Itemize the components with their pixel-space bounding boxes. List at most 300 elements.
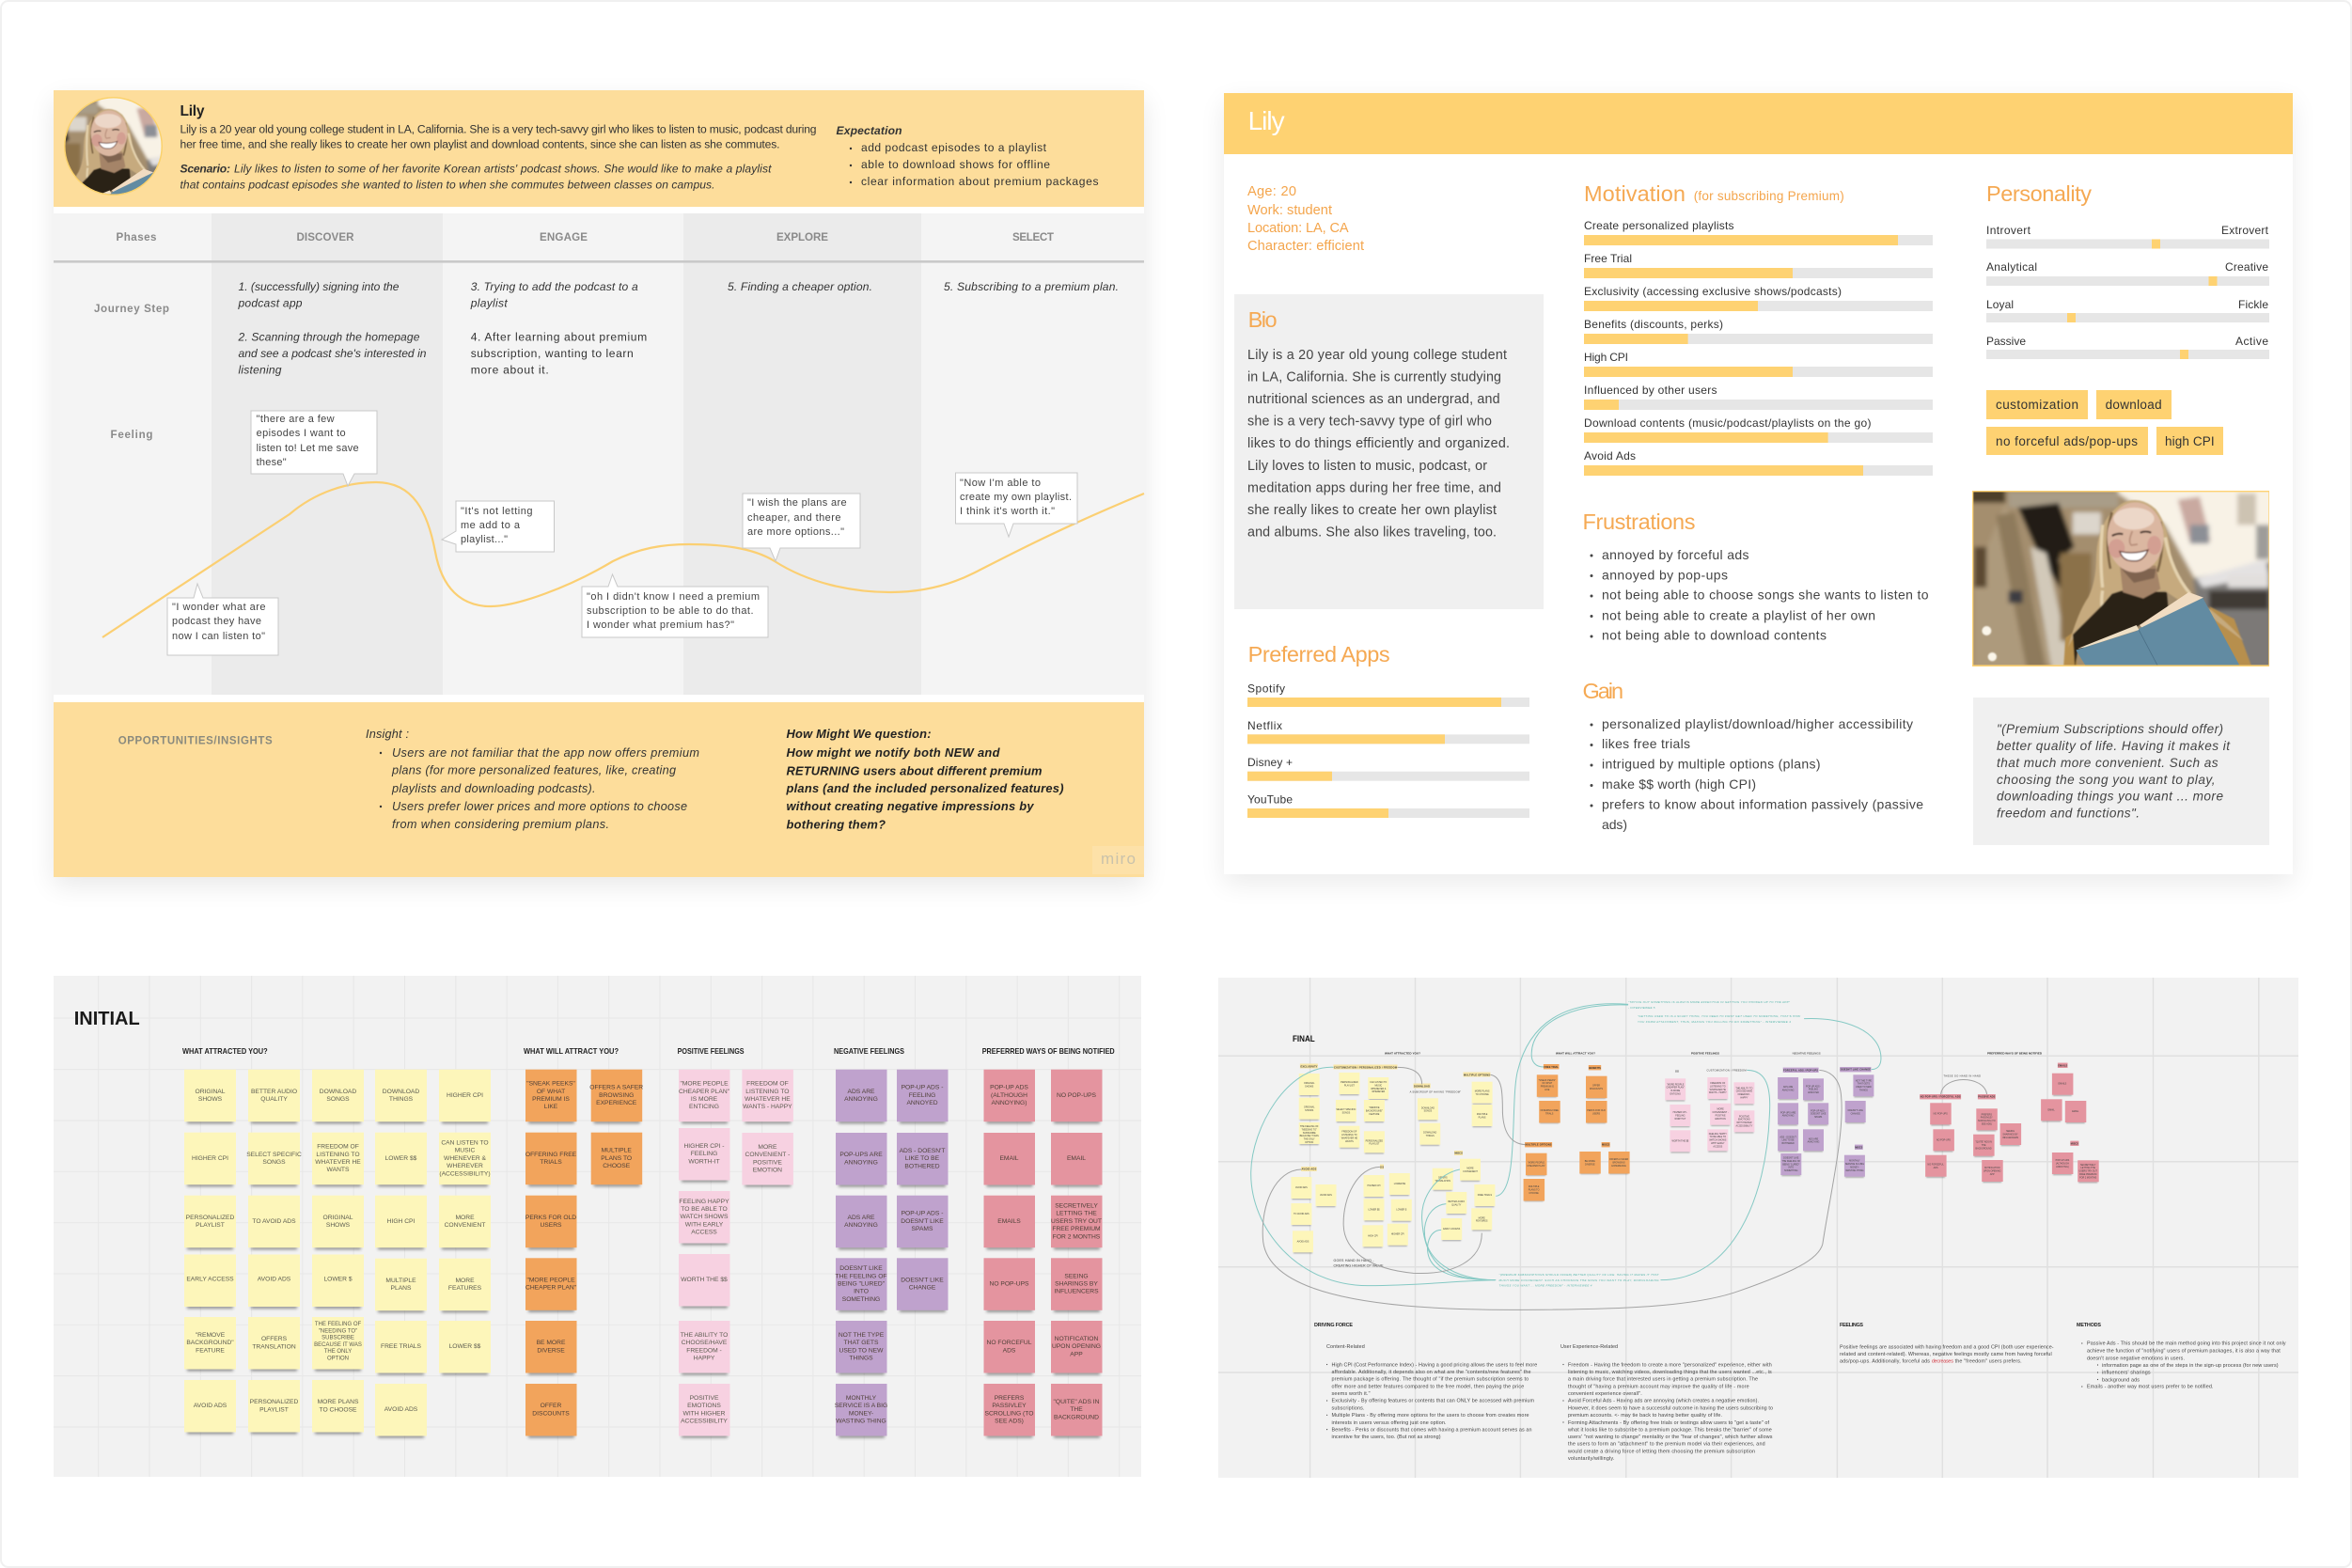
red clusters: FOR 2 MONTHS <box>2079 1176 2097 1179</box>
content-related bullets: Multiple Plans - By offering more options for the users to choose from creates more <box>1331 1413 1529 1419</box>
driving force summary: Content-Related <box>1326 1344 1365 1350</box>
purple clusters: WASTING THING <box>1845 1169 1864 1172</box>
red clusters: SHARINGS BY <box>2002 1133 2018 1136</box>
yellow clusters: HIGHER CPI <box>1368 1184 1381 1187</box>
purple sticky notes: negative feelings: ANNOYING <box>844 1159 878 1166</box>
purple clusters: POP-UP ADS - <box>1811 1109 1826 1112</box>
journey steps: engage <box>470 280 647 377</box>
yellow clusters: WHATEVER HE <box>1341 1137 1357 1139</box>
purple clusters: ANNOYING <box>1808 1141 1820 1144</box>
purple sticky notes: negative feelings: LIKE TO BE <box>905 1155 940 1162</box>
motivation bars: Download contents (music/podcast/playlists on the go) <box>1584 416 1871 430</box>
feelings summary: the "freedom" users prefers. <box>1955 1359 2022 1365</box>
red sticky notes: preferred ways of being notified: SEEING <box>1064 1273 1089 1279</box>
preferred apps: Disney + <box>1247 756 1293 769</box>
pink sticky notes: positive feelings: "MORE PEOPLE <box>680 1081 729 1088</box>
miro watermark <box>1092 846 1144 874</box>
speech bubble: there are a few: episodes I want to <box>257 428 346 439</box>
red clusters: APP <box>1990 1173 1995 1176</box>
red clusters: PASSIVLEY <box>1981 1117 1993 1120</box>
methods summary: achieve the function of "notifying" users of premium packages, it is also a way that <box>2087 1349 2281 1355</box>
user-experience bullets: users' "not wanting to change" mentality or the "fear of changes", which further allows <box>1568 1435 1773 1440</box>
red clusters: NO FORCEFUL <box>1928 1164 1944 1167</box>
demographics: Character: efficient <box>1247 239 1364 254</box>
yellow sticky notes: what attracted you: LOWER $$ <box>449 1343 481 1350</box>
yellow sticky notes: what attracted you: PLAYLIST <box>259 1406 289 1413</box>
interview quotes: "GETTING USED TO IS A SCARY THING, YOU NEED TO FIRST GET USED TO SOMETHING, THAT'S HOW <box>1638 1014 1801 1018</box>
purple clusters: DOESN'T LIKE <box>1783 1156 1799 1160</box>
purple sticky notes: negative feelings: MONEY- <box>849 1410 873 1417</box>
category labels: CUSTOMIZATION / PERSONALIZED / FREEDOM <box>1334 1065 1397 1069</box>
yellow clusters: OPTION <box>1305 1141 1314 1144</box>
user-experience bullets: Forming Attachments - By offering free trials or testings allow users to "get a taste" of <box>1568 1420 1769 1426</box>
demographics: Location: LA, CA <box>1247 221 1349 236</box>
yellow sticky notes: what attracted you: TRANSLATION <box>252 1343 296 1350</box>
speech bubble: own playlist: I think it's worth it." <box>960 506 1055 517</box>
speech bubble: premium subscription: "oh I didn't know I need a premium <box>587 591 760 603</box>
category labels: NO POP-UPS / FORCEFUL ADS <box>1921 1095 1961 1099</box>
user-experience bullets <box>1562 1362 1773 1462</box>
insights: Users are not familiar that the app now offers premium <box>392 746 699 760</box>
red clusters <box>1925 1074 2099 1183</box>
yellow sticky notes: what attracted you: SONGS <box>262 1159 286 1166</box>
methods summary: Passive Ads - This should be the main method going into this project since it not only <box>2087 1341 2286 1347</box>
pink clusters: WANTS - HAPPY <box>1709 1091 1727 1094</box>
motivation bars: High CPI <box>1584 351 1628 364</box>
column heading: POSITIVE FEELINGS <box>678 1046 745 1056</box>
yellow sticky notes: what attracted you: HIGHER CPI <box>447 1092 483 1099</box>
journey steps: discover <box>237 280 427 377</box>
yellow sticky notes: what attracted you: PLANS <box>391 1285 412 1292</box>
yellow sticky notes: what attracted you: FREEDOM OF <box>317 1144 359 1151</box>
red sticky notes: preferred ways of being notified: POP-UP ADS <box>990 1085 1028 1091</box>
red sticky notes: preferred ways of being notified: NO POP-UPS <box>989 1281 1029 1288</box>
category labels: $$ <box>1675 1069 1679 1073</box>
frustrations list: Frustrations <box>1583 510 1696 534</box>
speech bubble: there are a few: listen to! Let me save <box>257 443 359 454</box>
category labels: MISCS <box>1602 1143 1610 1147</box>
red clusters: POP-UP ADS <box>2056 1159 2070 1162</box>
yellow clusters: WANTS <box>1345 1140 1354 1143</box>
pink sticky notes: positive feelings: WORTH THE $$ <box>681 1277 728 1283</box>
column headings: POSITIVE FEELINGS <box>1691 1052 1719 1056</box>
user-experience bullets: a main driving force that interested users in getting a premium subscription. The <box>1568 1377 1758 1383</box>
purple clusters: SERVICE IS A BIG <box>1845 1163 1864 1166</box>
yellow sticky notes: what attracted you: QUALITY <box>260 1096 288 1103</box>
red sticky notes: preferred ways of being notified: (ALTHOUGH <box>991 1092 1027 1099</box>
yellow clusters: TO AVOID ADS <box>1294 1213 1309 1215</box>
keyword tags: no forceful ads/pop-ups <box>1996 434 2138 448</box>
category labels: THESE GO HAND IN HAND <box>1944 1074 1981 1077</box>
interview quotes: "TRYING OUT SOMETHING IS ALWAYS MORE EFFECTIVE IN GETTING YOU HOOKED UP TO THE APP" <box>1628 1000 1791 1004</box>
connector curves <box>1251 1004 1987 1309</box>
pink clusters: CHEAPER PLAN" <box>1667 1087 1685 1090</box>
driving force summary: User Experience-Related <box>1560 1344 1618 1350</box>
yellow clusters: AVOID ADS <box>1297 1240 1309 1243</box>
yellow sticky notes: what attracted you: SHOWS <box>198 1096 223 1103</box>
motivation bars: Motivation <box>1584 181 1686 206</box>
pink clusters: TO BE ABLE TO <box>1709 1136 1726 1138</box>
methods summary: influencers' sharings <box>2102 1371 2151 1376</box>
personality sliders: Introvert <box>1986 224 2031 237</box>
feelings summary: ads/pop-ups. Additionally, forceful ads <box>1840 1359 1930 1365</box>
expectation list: clear information about premium packages <box>861 175 1098 188</box>
purple clusters: DOESN'T LIKE <box>1848 1109 1863 1112</box>
how might we question: How might we notify both NEW and <box>786 745 1001 760</box>
purple sticky notes: negative feelings: THE FEELING OF <box>835 1273 887 1279</box>
frustrations list: annoyed by forceful ads <box>1602 547 1748 562</box>
driving force summary <box>1314 1323 1773 1462</box>
yellow clusters: FREE TRIALS <box>1478 1194 1492 1197</box>
pink clusters: WORTH-IT <box>1674 1118 1686 1121</box>
content-related bullets: incentive for the users, too. (But not as strong) <box>1331 1435 1441 1440</box>
purple sticky notes: negative feelings: BOTHERED <box>904 1163 940 1169</box>
pink sticky notes: positive feelings: POSITIVE <box>753 1159 782 1166</box>
red clusters: EMAIL <box>2072 1110 2079 1113</box>
red sticky notes: preferred ways of being notified: NOTIFICATION <box>1055 1336 1099 1342</box>
orange clusters: OF WHAT <box>1542 1082 1553 1085</box>
pink clusters: ACCESS <box>1713 1145 1723 1148</box>
purple clusters: BEING "LURED" <box>1782 1163 1799 1166</box>
pink clusters: ENTICING <box>1670 1093 1681 1096</box>
purple sticky notes: negative feelings: FEELING <box>909 1092 935 1099</box>
yellow sticky notes: what attracted you: ORIGINAL <box>196 1089 226 1095</box>
purple clusters: POP-UPS ARE <box>1780 1111 1796 1114</box>
speech bubble: premium subscription <box>582 574 768 637</box>
feeling curve <box>102 482 1144 637</box>
motivation bars: Free Trial <box>1584 252 1632 265</box>
personality sliders: Personality <box>1986 181 2092 206</box>
orange sticky notes: what will attract you: EXPERIENCE <box>596 1100 637 1106</box>
yellow sticky notes: what attracted you: WHENEVER & <box>444 1155 487 1162</box>
column headings: PREFERRED WAYS OF BEING NOTIFIED <box>1987 1052 2043 1056</box>
pink clusters: EMOTIONS <box>1738 1119 1750 1121</box>
orange clusters: "MORE PEOPLE <box>1528 1162 1545 1165</box>
pink clusters: FREEDOM OF <box>1710 1082 1726 1085</box>
purple clusters: USED TO NEW <box>1856 1086 1873 1089</box>
driving force summary: DRIVING FORCE <box>1314 1323 1353 1328</box>
yellow clusters: SUBSCRIBE <box>1303 1132 1316 1135</box>
personality sliders: Active <box>2235 335 2268 348</box>
keyword tags: download <box>2106 398 2162 412</box>
purple clusters: POP-UP ADS - <box>1806 1085 1821 1088</box>
red clusters: UPON OPENING <box>1984 1169 2001 1172</box>
red sticky notes: preferred ways of being notified: EMAIL <box>999 1155 1019 1162</box>
category labels: EXCLUSIVITY <box>1301 1064 1318 1068</box>
quote box: freedom and functions". <box>1997 807 2140 821</box>
purple clusters <box>1778 1074 1874 1178</box>
yellow clusters: SELECT SPECIFIC <box>1336 1108 1356 1111</box>
category labels: FORCEFUL ADS / POP-UPS <box>1783 1068 1818 1072</box>
purple clusters: MONEY- <box>1850 1166 1859 1168</box>
user-experience bullets: However, it does seem to have a successful outcome in having the users subscribing to <box>1568 1405 1773 1411</box>
user-experience bullets: the users to form an "attachment" to the premium model via their experiences, and <box>1568 1442 1765 1448</box>
speech bubble: I wonder: "I wonder what are <box>172 602 265 613</box>
yellow sticky notes: what attracted you: WHEREVER <box>447 1163 483 1169</box>
pink clusters: POSITIVE <box>1716 1114 1726 1117</box>
red clusters: USERS TRY OUT <box>2079 1170 2097 1173</box>
personality sliders: Fickle <box>2238 298 2268 311</box>
purple sticky notes: negative feelings: THINGS <box>849 1356 873 1361</box>
motivation bars: Influenced by other users <box>1584 384 1717 397</box>
user-experience bullets: convenient experience overall". <box>1568 1391 1642 1397</box>
yellow sticky notes: what attracted you: FEATURE <box>196 1347 225 1354</box>
yellow sticky notes: what attracted you: OFFERS <box>261 1336 288 1342</box>
purple sticky notes: negative feelings: BEING "LURED" <box>838 1281 886 1288</box>
red sticky notes: preferred ways of being notified: EMAILS <box>997 1218 1021 1225</box>
orange sticky notes: what will attract you: BROWSING <box>599 1092 634 1099</box>
category labels: MULTIPLE OPTIONS <box>1464 1073 1490 1076</box>
yellow clusters: SONGS <box>1342 1111 1351 1114</box>
category labels: $$ <box>1380 1165 1384 1168</box>
red sticky notes: preferred ways of being notified: SECRETIVELY <box>1055 1202 1098 1209</box>
yellow clusters: CAN LISTEN TO <box>1370 1081 1387 1084</box>
user-experience bullets: thought of "having a premium account may improve the quality of life - more <box>1568 1384 1749 1389</box>
insights: from when considering premium plans. <box>392 818 609 831</box>
insights: Insight : <box>366 728 409 741</box>
purple sticky notes: negative feelings: WASTING THING <box>836 1418 886 1425</box>
yellow clusters: PERSONALIZED <box>1341 1081 1358 1084</box>
speech bubble: plans cheaper: are more options..." <box>747 526 844 538</box>
red sticky notes: preferred ways of being notified: BACKGROUND <box>1054 1414 1099 1420</box>
pink sticky notes: positive feelings: CHOOSE/HAVE <box>682 1340 728 1346</box>
orange sticky notes: what will attract you: MULTIPLE <box>602 1148 632 1154</box>
speech bubble: there are a few <box>251 411 377 486</box>
red clusters: LETTING THE <box>2080 1167 2095 1169</box>
pink clusters: POSITIVE <box>1739 1115 1749 1118</box>
red sticky notes: preferred ways of being notified: UPON OPENING <box>1052 1343 1101 1350</box>
feelings summary: FEELINGS <box>1840 1323 1863 1328</box>
yellow clusters: "REMOVE <box>1369 1106 1380 1109</box>
purple clusters: THAT GETS <box>1858 1083 1870 1086</box>
speech bubble: not letting me add: "It's not letting <box>461 506 532 517</box>
journey steps: discover: 1. (successfully) signing into the <box>239 280 400 293</box>
user-experience bullets: Avoid Forceful Ads - Having ads are annoying (which creates a negative emotion). <box>1568 1399 1759 1404</box>
opportunities band <box>54 702 1144 877</box>
speech bubble: plans cheaper: cheaper, and there <box>747 512 840 524</box>
pink sticky notes: positive feelings: TO BE ABLE TO <box>681 1206 728 1213</box>
yellow sticky notes: what attracted you: BACKGROUND" <box>186 1340 234 1346</box>
speech bubble: plans cheaper: "I wish the plans are <box>747 497 847 509</box>
speech bubble: not letting me add: me add to a <box>461 520 521 531</box>
yellow sticky notes: what attracted you: SHOWS <box>326 1222 351 1229</box>
yellow clusters: PLAYLIST <box>1344 1084 1355 1087</box>
panel: journey map <box>0 68 1144 886</box>
yellow sticky notes: what attracted you: MORE <box>455 1278 475 1284</box>
orange clusters: PREMIUM IS <box>1541 1086 1554 1089</box>
gain list: personalized playlist/download/higher accessibility <box>1602 716 1913 731</box>
how might we question: How Might We question: <box>786 727 931 741</box>
yellow clusters: LOWER $$ <box>1394 1183 1406 1185</box>
orange clusters: DISCOUNTS <box>1590 1088 1603 1090</box>
yellow sticky notes: what attracted you: MUSIC <box>455 1148 475 1154</box>
orange sticky notes: what will attract you: USERS <box>540 1222 562 1229</box>
pink clusters: HIGHER CPI - <box>1673 1111 1687 1114</box>
speech bubble: own playlist <box>955 473 1077 537</box>
yellow sticky notes: what attracted you: PERSONALIZED <box>250 1399 298 1405</box>
yellow sticky notes: what attracted you: FREE TRIALS <box>381 1343 422 1350</box>
speech bubble: not letting me add <box>442 501 555 552</box>
red sticky notes: preferred ways of being notified: THE <box>1070 1406 1083 1413</box>
journey steps: discover: listening <box>239 364 282 377</box>
red sticky notes: preferred ways of being notified: NO FORCEFUL <box>987 1340 1032 1346</box>
motivation bars <box>1584 181 1933 476</box>
speech bubble: I wonder: now I can listen to" <box>172 631 265 642</box>
user-experience bullets: listening to music, watching videos, downloading things that the users wanted ...etc., is <box>1568 1370 1772 1375</box>
purple sticky notes: negative feelings: DOESN'T LIKE <box>839 1265 883 1272</box>
red sticky notes: preferred ways of being notified: ANNOYING) <box>992 1100 1027 1106</box>
content-related bullets: Exclusivity - By offering features or contents that can ONLY be accessed with premium <box>1331 1399 1534 1404</box>
yellow clusters: ORIGINAL <box>1304 1082 1315 1085</box>
pink clusters <box>1665 1077 1754 1152</box>
pink clusters: FEELING HAPPY <box>1709 1133 1727 1136</box>
column headings: WHAT WILL ATTRACT YOU? <box>1556 1052 1595 1056</box>
yellow clusters: THINGS <box>1426 1135 1435 1137</box>
bio box: meditation apps during her free time, and <box>1247 480 1501 495</box>
pink clusters: WHATEVER HE <box>1710 1089 1726 1091</box>
red sticky notes: preferred ways of being notified: ADS <box>1003 1347 1016 1354</box>
yellow sticky notes: what attracted you: PERSONALIZED <box>186 1215 234 1221</box>
yellow clusters: BETTER AUDIO <box>1449 1200 1465 1203</box>
demographics <box>1247 184 1364 254</box>
yellow clusters: DOWNLOAD <box>1423 1132 1437 1135</box>
persona description: Lily is a 20 year old young college student in LA, California. She is a very tech-savvy girl who likes to listen to music, podcast during <box>180 123 816 136</box>
keyword tags: high CPI <box>2165 434 2215 448</box>
yellow clusters: THE FEELING OF <box>1300 1125 1319 1128</box>
bio box: Bio <box>1248 307 1278 332</box>
pink clusters: WORTH THE $$ <box>1672 1139 1689 1142</box>
yellow clusters: SHOWS <box>1305 1085 1314 1088</box>
category labels: MISCS <box>1855 1145 1863 1149</box>
motivation bars: Avoid Ads <box>1584 449 1636 463</box>
purple sticky notes: negative feelings: ADS ARE <box>848 1089 875 1095</box>
yellow clusters: MORE <box>1479 1216 1485 1219</box>
yellow sticky notes: what attracted you: "NEEDING TO" <box>319 1328 357 1334</box>
avatar photo of Lily <box>64 97 163 196</box>
yellow sticky notes: what attracted you: MULTIPLE <box>385 1278 416 1284</box>
gain list <box>1583 679 1923 832</box>
purple clusters: ADS ARE <box>1809 1137 1819 1140</box>
handwritten note: goes hand in hand: CREATING HIGHER CP VALUE <box>1333 1264 1384 1268</box>
methods summary: information page as one of the steps in the sign-up process (for new users) <box>2102 1363 2279 1369</box>
yellow clusters: LISTENING TO <box>1341 1134 1357 1137</box>
speech bubble: there are a few: these" <box>257 457 287 468</box>
purple clusters: ADS - DOESN'T <box>1780 1136 1796 1138</box>
red clusters: EMAIL <box>2048 1108 2055 1111</box>
red clusters: SECRETIVELY <box>2080 1164 2096 1167</box>
preferred apps: Netflix <box>1247 719 1282 732</box>
speech bubble: plans cheaper <box>743 494 860 561</box>
pink clusters: EMOTION <box>1716 1118 1726 1121</box>
how might we question: plans (and the included personalized features) <box>786 781 1064 795</box>
red clusters: SCROLLING (TO <box>1978 1120 1996 1122</box>
card header <box>1224 93 2293 154</box>
motivation bars: Create personalized playlists <box>1584 219 1733 232</box>
red sticky notes: preferred ways of being notified: LETTING THE <box>1056 1211 1097 1217</box>
row label: feeling: Feeling <box>111 429 152 441</box>
red clusters: NO POP-UPS <box>1936 1138 1951 1141</box>
pink clusters: FEELING <box>1675 1114 1686 1117</box>
pink sticky notes: positive feelings: MORE <box>758 1144 777 1151</box>
pink sticky notes: positive feelings: EMOTION <box>753 1168 782 1173</box>
quote box: downloading things you want ... more <box>1997 790 2223 804</box>
pink sticky notes: positive feelings: FEELING <box>691 1151 717 1157</box>
yellow clusters: LOWER $ <box>1396 1209 1407 1212</box>
personality sliders: Loyal <box>1986 298 2014 311</box>
content-related bullets: subscriptions. <box>1331 1405 1365 1411</box>
column heading: WHAT WILL ATTRACT YOU? <box>524 1046 619 1056</box>
orange sticky notes: what will attract you: LIKE <box>544 1104 558 1110</box>
expectation list <box>837 124 1098 188</box>
purple sticky notes: negative feelings: POP-UP ADS - <box>902 1211 943 1217</box>
content-related bullets: Benefits - Perks or discounts that comes with having a premium account serves as an <box>1331 1427 1532 1433</box>
yellow sticky notes: what attracted you: HIGH CPI <box>387 1218 415 1225</box>
pink clusters: HAPPY <box>1740 1097 1748 1100</box>
red sticky notes: preferred ways of being notified: SEE ADS) <box>995 1418 1024 1425</box>
yellow sticky notes: what attracted you: SONGS <box>326 1096 350 1103</box>
purple sticky notes: negative feelings: CHANGE <box>909 1285 936 1292</box>
interview quotes: - INTERVIEWEE 5 <box>1628 1006 1655 1010</box>
yellow sticky notes: what attracted you: SUBSCRIBE <box>321 1336 354 1341</box>
speech bubble: I wonder <box>167 584 278 655</box>
yellow sticky notes: what attracted you: ORIGINAL <box>323 1215 353 1221</box>
purple sticky notes: negative feelings: SPAMS <box>912 1226 933 1232</box>
bio box: and albums. She also likes traveling, too. <box>1247 525 1497 540</box>
orange sticky notes: what will attract you <box>525 1070 643 1438</box>
pink sticky notes: positive feelings: WHATEVER HE <box>745 1096 791 1103</box>
orange clusters: USERS <box>1592 1112 1601 1115</box>
interview quotes: THINGS YOU WANT ... MORE FREEDOM" - INTERVIEWEE 4 <box>1498 1284 1592 1288</box>
content-related bullets: offer more and better features compared to the free model, then paying the price <box>1331 1384 1524 1389</box>
gain list: make $$ worth (high CPI) <box>1602 776 1756 792</box>
pink clusters: WITH EARLY <box>1711 1142 1725 1145</box>
bio box: Lily is a 20 year old young college student <box>1247 348 1507 363</box>
purple clusters: DOESN'T LIKE <box>1811 1113 1827 1116</box>
purple sticky notes: negative feelings: ANNOYING <box>844 1096 878 1103</box>
content-related bullets: affordable. Additionally, it depends also on what are the "contents/new features" the <box>1331 1370 1530 1375</box>
yellow sticky notes: what attracted you: EARLY ACCESS <box>186 1277 234 1282</box>
quote box: choosing the song you want to play, <box>1997 773 2215 787</box>
purple sticky notes: negative feelings: DOESN'T LIKE <box>901 1218 944 1225</box>
red clusters: ANNOYING) <box>2056 1166 2069 1168</box>
interview quotes: YOU FORM ATTACHMENT, THUS, MAKING YOU WILLING TO DO SOMETHING" - INTERVIEWEE 4 <box>1638 1020 1791 1024</box>
red clusters: NOTIFICATION <box>1984 1167 2000 1169</box>
pink sticky notes: positive feelings: CHEAPER PLAN" <box>679 1089 730 1095</box>
orange sticky notes: what will attract you: OFFERING FREE <box>525 1152 577 1158</box>
yellow clusters: FEATURE <box>1369 1113 1380 1116</box>
gain list: ads) <box>1602 817 1627 832</box>
pink sticky notes: positive feelings: FREEDOM OF <box>746 1081 789 1088</box>
orange clusters: PERKS FOR OLD <box>1587 1109 1606 1112</box>
purple clusters: INTO <box>1788 1167 1794 1169</box>
yellow clusters: LOWER $$ <box>1368 1208 1380 1211</box>
category labels: MULTIPLE OPTIONS <box>1525 1143 1552 1147</box>
yellow sticky notes: what attracted you: "REMOVE <box>196 1332 226 1339</box>
expectation list: able to download shows for offline <box>861 158 1050 171</box>
category labels: FREE TRIAL <box>1544 1065 1559 1069</box>
column heading: PREFERRED WAYS OF BEING NOTIFIED <box>982 1046 1115 1056</box>
phases header: EXPLORE <box>776 231 828 243</box>
panel: final affinity board <box>1218 978 2298 1478</box>
orange clusters: OFFER <box>1592 1085 1600 1088</box>
yellow sticky notes: what attracted you: TO CHOOSE <box>319 1406 357 1413</box>
personality sliders: Creative <box>2225 260 2268 274</box>
column heading: NEGATIVE FEELINGS <box>834 1046 904 1056</box>
purple clusters: ANNOYING <box>1782 1089 1795 1091</box>
pink clusters: IS MORE <box>1670 1090 1681 1092</box>
yellow clusters: TRANSLATION <box>1435 1180 1450 1183</box>
content-related bullets: interests in users versus offering just one option. <box>1331 1420 1446 1426</box>
